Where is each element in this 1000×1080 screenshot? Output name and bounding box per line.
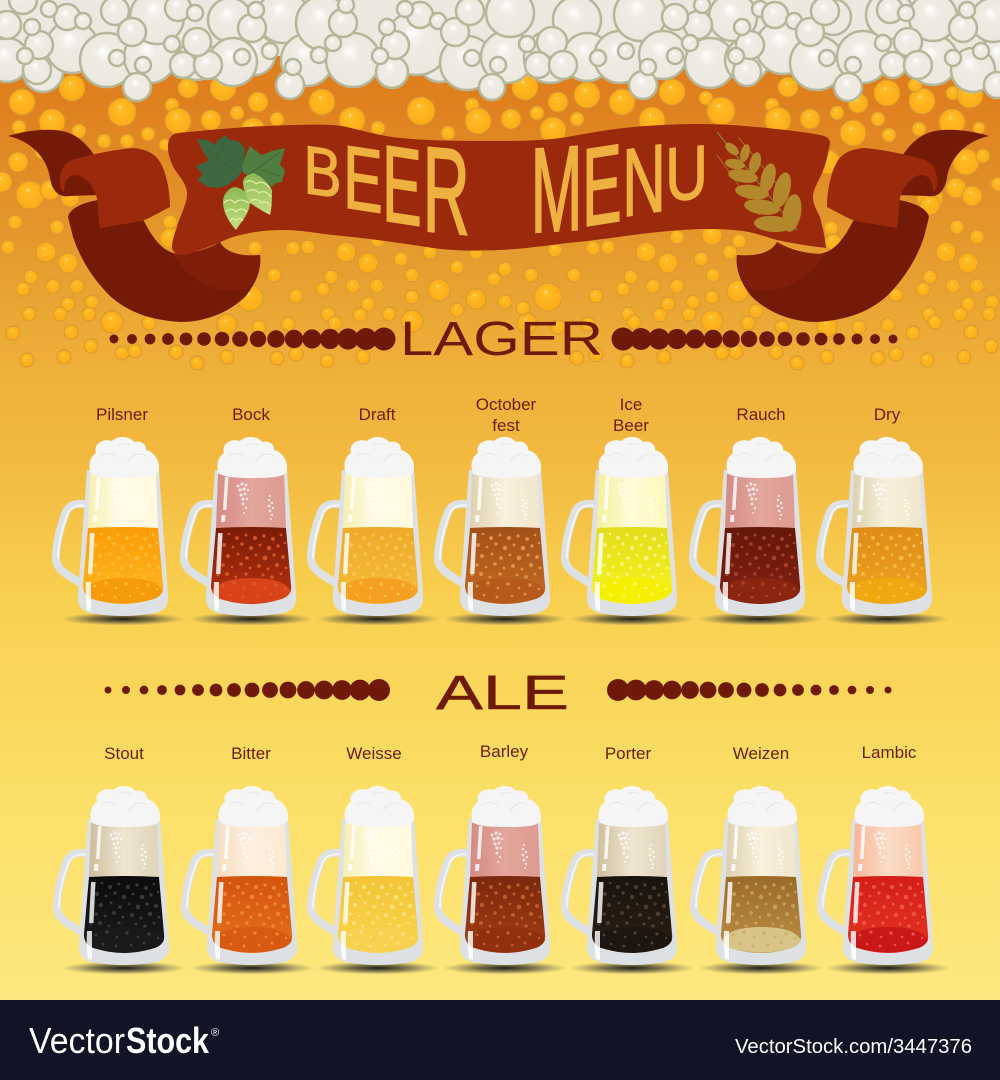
mug: Bitter — [185, 744, 314, 974]
mug: Ice Beer: Ice — [620, 395, 642, 414]
heading: LAGER: LAGER — [400, 313, 603, 366]
mug: Dry — [820, 405, 949, 626]
mug: Barley — [438, 742, 567, 974]
mug: Pilsner — [56, 405, 185, 626]
right dotted line — [607, 679, 892, 701]
mug: Stout: Stout — [104, 744, 144, 763]
foam — [0, 0, 1000, 101]
ribbon banner with title — [8, 121, 989, 322]
mug: Porter — [565, 744, 694, 974]
mug: Lambic: Lambic — [862, 743, 917, 762]
mug: Ice Beer — [565, 395, 694, 626]
mug: Stout — [57, 744, 186, 974]
logo: VectorStock: Stock — [126, 1020, 210, 1061]
title: BEER MENU: R — [423, 121, 470, 261]
heading: ALE: ALE — [436, 667, 569, 720]
beer bubbles — [0, 74, 1000, 370]
mug: Rauch — [693, 405, 822, 626]
icon: hops — [196, 135, 285, 230]
left dotted line — [104, 679, 390, 701]
LAGER divider — [110, 313, 898, 366]
title: BEER MENU — [304, 121, 708, 261]
stock image id: VectorStock.com/3447376 — [735, 1036, 972, 1058]
mug: Bitter: Bitter — [231, 744, 271, 763]
mug: Barley: Barley — [480, 742, 529, 761]
ale mugs — [57, 742, 950, 974]
mug: Weizen: Weizen — [733, 744, 789, 763]
mug: Bock: Bock — [232, 405, 270, 424]
mug: Rauch: Rauch — [736, 405, 786, 424]
banner — [168, 124, 830, 255]
mug: Bock — [184, 405, 313, 626]
title: BEER MENU: E — [343, 127, 383, 233]
logo: VectorStock — [29, 1020, 219, 1061]
mug: Lambic — [821, 743, 950, 974]
mug: October fest — [438, 395, 567, 626]
title: BEER MENU: B — [304, 132, 342, 213]
mug: Porter: Porter — [605, 744, 651, 763]
mug: Ice Beer: Beer — [613, 416, 649, 435]
lager mugs — [56, 395, 949, 626]
mug: Dry: Dry — [874, 405, 901, 424]
mug: Pilsner: Pilsner — [96, 405, 148, 424]
mug: October fest: October — [476, 395, 537, 414]
title: BEER MENU: M — [531, 121, 582, 259]
mug: Draft: Draft — [359, 405, 396, 424]
logo: VectorStock: Vector — [29, 1020, 125, 1061]
mug: Weisse — [311, 744, 440, 974]
mug: Weisse: Weisse — [346, 744, 402, 763]
ALE divider — [104, 667, 892, 720]
mug: Weizen — [694, 744, 823, 974]
footer bar — [0, 1000, 1000, 1080]
left dotted line — [110, 328, 396, 350]
title: BEER MENU: N — [622, 124, 666, 238]
title: BEER MENU: E — [582, 121, 622, 250]
mug: October fest: fest — [492, 416, 520, 435]
title: BEER MENU: U — [665, 131, 708, 218]
mug: Draft — [311, 405, 440, 626]
icon: wheat — [717, 132, 804, 233]
logo: VectorStock: ® — [211, 1027, 219, 1039]
left ribbon tail — [8, 130, 260, 322]
right ribbon tail — [737, 130, 989, 322]
right dotted line — [612, 328, 898, 350]
title: BEER MENU: E — [382, 122, 422, 250]
